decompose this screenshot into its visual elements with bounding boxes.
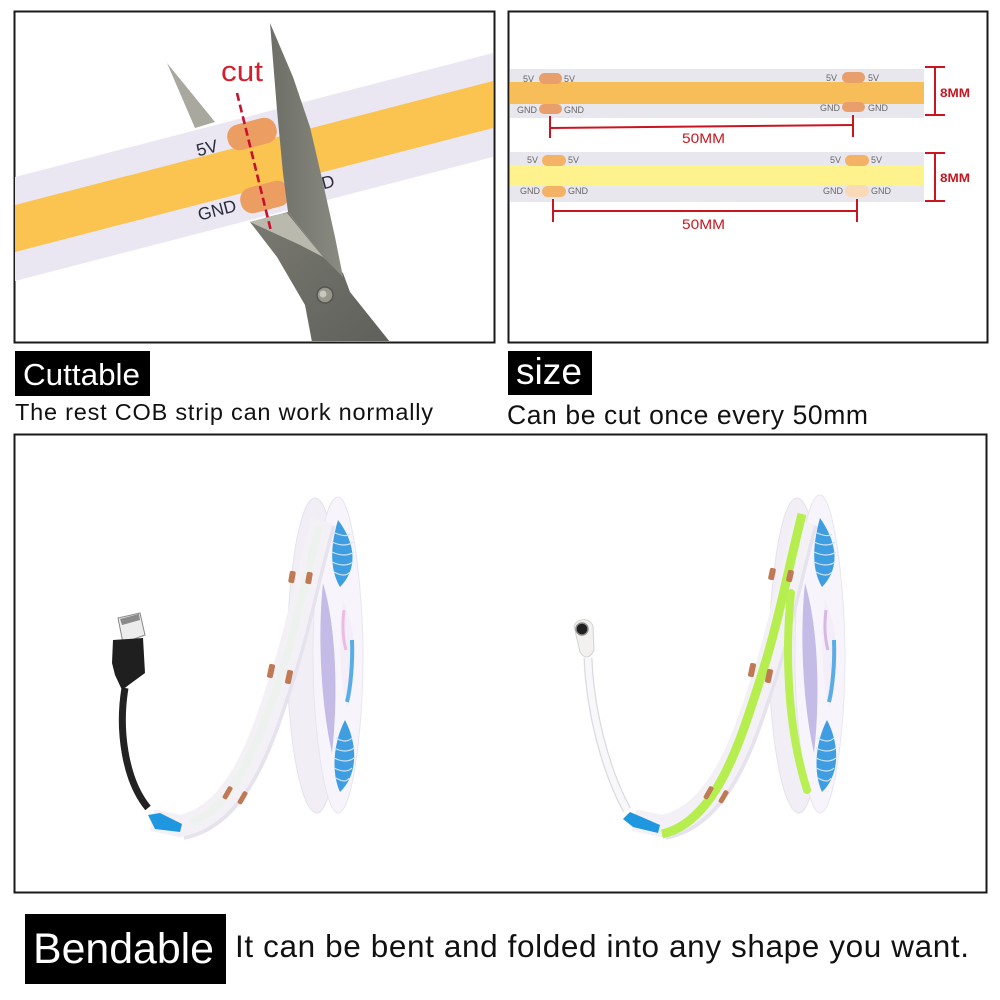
- strip shadow: [182, 523, 324, 828]
- yellow strip: GND: [871, 186, 892, 196]
- warm strip: GND: [564, 105, 584, 115]
- warm strip: 5V: [564, 74, 575, 84]
- yellow strip: GND: [568, 186, 588, 196]
- warm strip: GND: [868, 103, 888, 113]
- centre hub: [340, 600, 355, 707]
- cut dashed line: [237, 93, 271, 231]
- heading: Cuttable: Cuttable: [23, 357, 140, 392]
- rear green strand: [788, 593, 807, 790]
- icon: USB metal plug: [118, 613, 145, 643]
- green COB line: [662, 514, 802, 834]
- blue strip tab: [623, 812, 660, 833]
- yellow strip 50mm dimension: [553, 199, 857, 222]
- heading: Cuttable: [15, 351, 150, 396]
- panel: bendable photos: [14, 434, 986, 892]
- yellow strip: 5V: [871, 155, 882, 165]
- text: size caption: Can be cut once every 50mm: [507, 400, 868, 430]
- text: cuttable caption: The rest COB strip can work normally: [15, 399, 433, 425]
- reel with USB plug: [112, 497, 363, 832]
- blue window upper: [332, 520, 354, 587]
- icon: USB black housing: [112, 638, 145, 690]
- icon: lower scissor blade tip: [167, 63, 215, 128]
- heading: Bendable: Bendable: [33, 925, 214, 973]
- reel front disc: [795, 495, 845, 813]
- strip labels: GND: [196, 195, 238, 225]
- copper pads: [227, 118, 287, 214]
- reel with DC socket: [574, 495, 845, 834]
- yellow strip: 5V: [527, 155, 538, 165]
- strip labels: [196, 139, 334, 220]
- blue window upper: [814, 518, 836, 587]
- heading: size: size: [516, 351, 582, 392]
- strip shadow: [664, 523, 806, 828]
- blue window lower: [334, 720, 354, 792]
- orange COB band: [15, 81, 493, 252]
- strip body: [152, 521, 322, 826]
- yellow strip: 5V: [830, 155, 841, 165]
- warm strip: 5V: [868, 73, 879, 83]
- yellow strip 8mm dimension: [925, 153, 945, 201]
- warm strip: GND: [820, 103, 840, 113]
- warm strip: 5V: [826, 73, 837, 83]
- warm strip 8MM label: 8MM: [940, 88, 970, 100]
- strip centre line: [190, 527, 319, 822]
- icon: scissor handle: [250, 212, 390, 342]
- LED strip base: [15, 53, 493, 281]
- icon: white cable: [588, 658, 627, 810]
- reel back disc: [287, 498, 342, 813]
- warm strip: 5V: [523, 74, 534, 84]
- blue window lower: [816, 720, 836, 792]
- icon: DC socket: [574, 620, 594, 657]
- purple window: [320, 583, 335, 753]
- warm strip 50mm dimension: [550, 115, 853, 138]
- heading: Bendable: [25, 914, 226, 984]
- warm strip 50MM label: 50MM: [682, 130, 725, 146]
- warm strip 8mm dimension: [925, 67, 945, 115]
- warm strip: [510, 69, 924, 118]
- yellow strip 50MM label: 50MM: [682, 216, 725, 232]
- icon: upper scissor blade: [250, 23, 343, 277]
- icon: USB cable: [122, 688, 148, 808]
- text: bendable caption: It can be bent and folded into any shape you want.: [235, 928, 969, 964]
- panel: size diagram: [508, 12, 988, 342]
- copper pads: [222, 571, 313, 805]
- strip labels: 5V: [194, 136, 220, 160]
- yellow strip: GND: [520, 186, 540, 196]
- yellow strip: 5V: [568, 155, 579, 165]
- panel: cuttable photo: [14, 12, 494, 342]
- copper pads: [703, 568, 794, 804]
- blue strip tab: [148, 813, 182, 832]
- strip labels: D: [319, 171, 337, 193]
- strip body: [634, 521, 804, 826]
- warm strip: GND: [517, 105, 538, 115]
- reel front disc: [313, 497, 363, 813]
- yellow strip: GND: [823, 186, 844, 196]
- purple window: [802, 583, 817, 753]
- yellow strip 8MM label: 8MM: [940, 173, 970, 185]
- yellow strip: [510, 152, 924, 202]
- centre hub: [822, 600, 837, 707]
- reel back disc: [769, 498, 824, 813]
- cut label: cut: [221, 56, 263, 88]
- icon: scissor pivot screw: [317, 287, 333, 303]
